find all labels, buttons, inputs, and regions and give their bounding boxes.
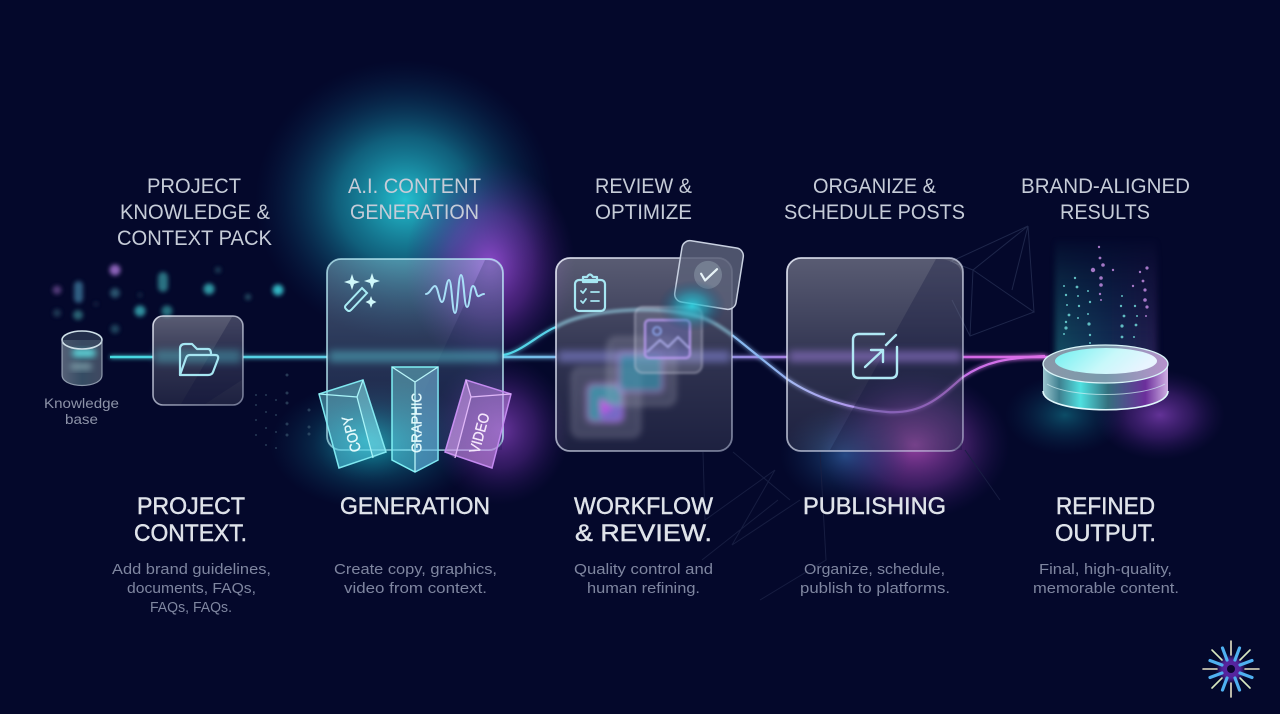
dot grid under line <box>255 374 310 449</box>
image card: back <box>572 368 640 437</box>
prism: graphic: GRAPHIC <box>408 393 426 453</box>
prism: video <box>445 380 511 468</box>
prism: video: VIDEO <box>466 411 493 455</box>
title: workflow and review <box>574 493 713 547</box>
title: refined output: OUTPUT. <box>1055 520 1156 547</box>
description: project context <box>112 561 271 616</box>
title: publishing: PUBLISHING <box>803 493 946 520</box>
section descriptions <box>112 561 1179 616</box>
hologram beam <box>1052 249 1159 353</box>
description: refined output: memorable content. <box>1033 580 1179 597</box>
heading: review and optimize: OPTIMIZE <box>595 201 692 224</box>
title: refined output: REFINED <box>1056 493 1155 520</box>
particles above pedestal <box>1063 246 1149 347</box>
heading: review and optimize: REVIEW & <box>595 175 692 198</box>
heading: ai content generation: A.I. CONTENT <box>348 175 481 198</box>
image card: middle <box>608 338 675 405</box>
description: publishing: publish to platforms. <box>800 580 950 597</box>
title: refined output <box>1055 493 1156 547</box>
curved flow line: inside publishing card <box>787 377 963 412</box>
title: project context: CONTEXT. <box>134 520 247 547</box>
prism: graphic <box>392 367 438 472</box>
review check badge <box>674 240 744 310</box>
heading: brand-aligned results: BRAND-ALIGNED <box>1021 175 1190 198</box>
icon: clipboard checklist <box>575 274 605 311</box>
description: publishing: Organize, schedule, <box>804 561 945 578</box>
heading: organize and schedule: SCHEDULE POSTS <box>784 201 965 224</box>
heading: review and optimize <box>595 175 692 224</box>
panel: generation card <box>313 259 511 482</box>
description: generation: Create copy, graphics, <box>334 561 497 578</box>
description: workflow <box>574 561 713 597</box>
panel: workflow and review card <box>556 240 744 451</box>
glow over badge corner <box>658 280 726 332</box>
panel: project context card <box>153 316 243 405</box>
section titles <box>134 493 1156 547</box>
image card: front <box>635 307 702 373</box>
description: project context: Add brand guidelines, <box>112 561 271 578</box>
description: refined output: Final, high-quality, <box>1039 561 1172 578</box>
title: workflow and review: & REVIEW. <box>575 520 712 547</box>
title: project context: PROJECT <box>137 493 245 520</box>
heading: project knowledge <box>117 175 272 250</box>
heading: ai content generation: GENERATION <box>350 201 479 224</box>
description: generation: video from context. <box>344 580 487 597</box>
heading: project knowledge: CONTEXT PACK <box>117 227 272 250</box>
column headings <box>117 175 1190 250</box>
panel: publishing card <box>787 258 963 451</box>
curved flow line: inside review card <box>556 310 732 335</box>
description: workflow: human refining. <box>587 580 700 597</box>
wireframe polyhedron <box>950 226 1034 336</box>
prism: copy <box>319 380 386 468</box>
background glows <box>255 60 1225 520</box>
left particle dots <box>52 264 284 334</box>
knowledge base label: Knowledge <box>44 396 119 411</box>
stacked image cards <box>572 307 702 437</box>
icon: sound wave <box>426 275 484 313</box>
icon: arrow in box <box>853 334 897 378</box>
heading: brand-aligned results: RESULTS <box>1060 201 1150 224</box>
icon: glowing pedestal <box>1043 345 1168 410</box>
main flow line <box>110 356 1050 358</box>
description: publishing <box>800 561 950 597</box>
title: workflow and review: WORKFLOW <box>574 493 713 520</box>
icon: folder <box>180 344 218 375</box>
glow behind prisms <box>313 398 417 482</box>
description: project context: documents, FAQs, <box>127 580 256 597</box>
logo: starburst <box>1203 641 1259 697</box>
title: project context <box>134 493 247 547</box>
heading: ai content generation <box>348 175 481 224</box>
heading: project knowledge: KNOWLEDGE & <box>120 201 270 224</box>
knowledge base label: base <box>65 412 98 427</box>
curved flow line: outer segments <box>503 327 1045 379</box>
icon: magic wand <box>344 273 380 311</box>
description: generation <box>334 561 497 597</box>
description: project context: FAQs, FAQs. <box>150 599 232 616</box>
description: refined output <box>1033 561 1179 597</box>
heading: organize and schedule <box>784 175 965 224</box>
icon: knowledge base cylinder <box>62 331 102 386</box>
heading: project knowledge: PROJECT <box>147 175 241 198</box>
heading: brand-aligned results <box>1021 175 1190 224</box>
title: generation: GENERATION <box>340 493 490 520</box>
description: workflow: Quality control and <box>574 561 713 578</box>
heading: organize and schedule: ORGANIZE & <box>813 175 936 198</box>
knowledge base label <box>44 396 119 427</box>
network lines <box>702 450 1000 600</box>
prism: copy: COPY <box>339 414 365 454</box>
